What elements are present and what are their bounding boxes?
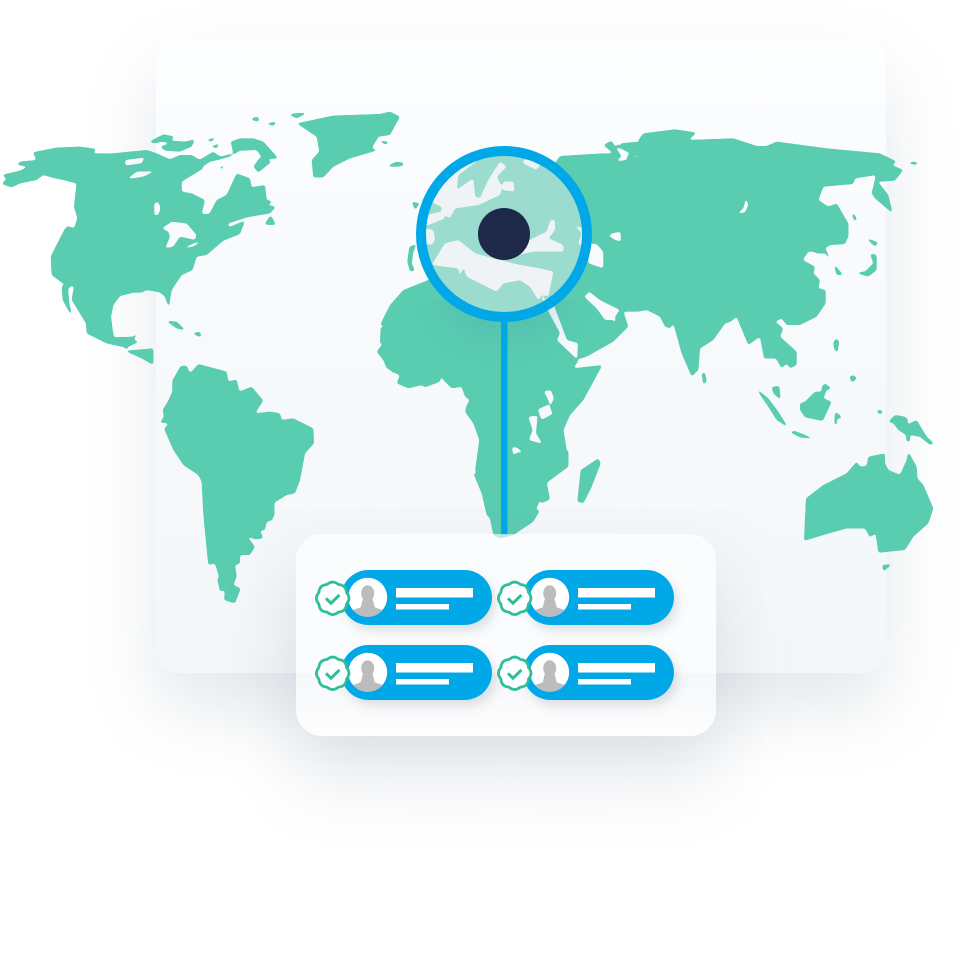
profile pill 3 bbox=[316, 645, 492, 700]
connector line bbox=[501, 318, 508, 535]
western europe fragments bbox=[400, 162, 420, 272]
indonesia, new guinea and australia bbox=[755, 383, 934, 572]
magnifier lens bbox=[420, 151, 587, 317]
panel: profiles card bbox=[296, 534, 716, 736]
profile pill 2 bbox=[498, 570, 674, 625]
south america bbox=[160, 364, 314, 603]
lens shadow on africa bbox=[458, 306, 563, 334]
africa and madagascar bbox=[377, 277, 602, 538]
profile pills bbox=[315, 570, 680, 709]
north america and greenland bbox=[2, 112, 404, 365]
profile pill 4 bbox=[498, 645, 674, 700]
world map bbox=[2, 112, 933, 603]
profile pill 1 bbox=[316, 570, 492, 625]
location dot bbox=[478, 208, 530, 260]
panel: map card bbox=[156, 38, 886, 673]
lens ring bbox=[421, 151, 587, 317]
eurasia bbox=[540, 129, 918, 385]
